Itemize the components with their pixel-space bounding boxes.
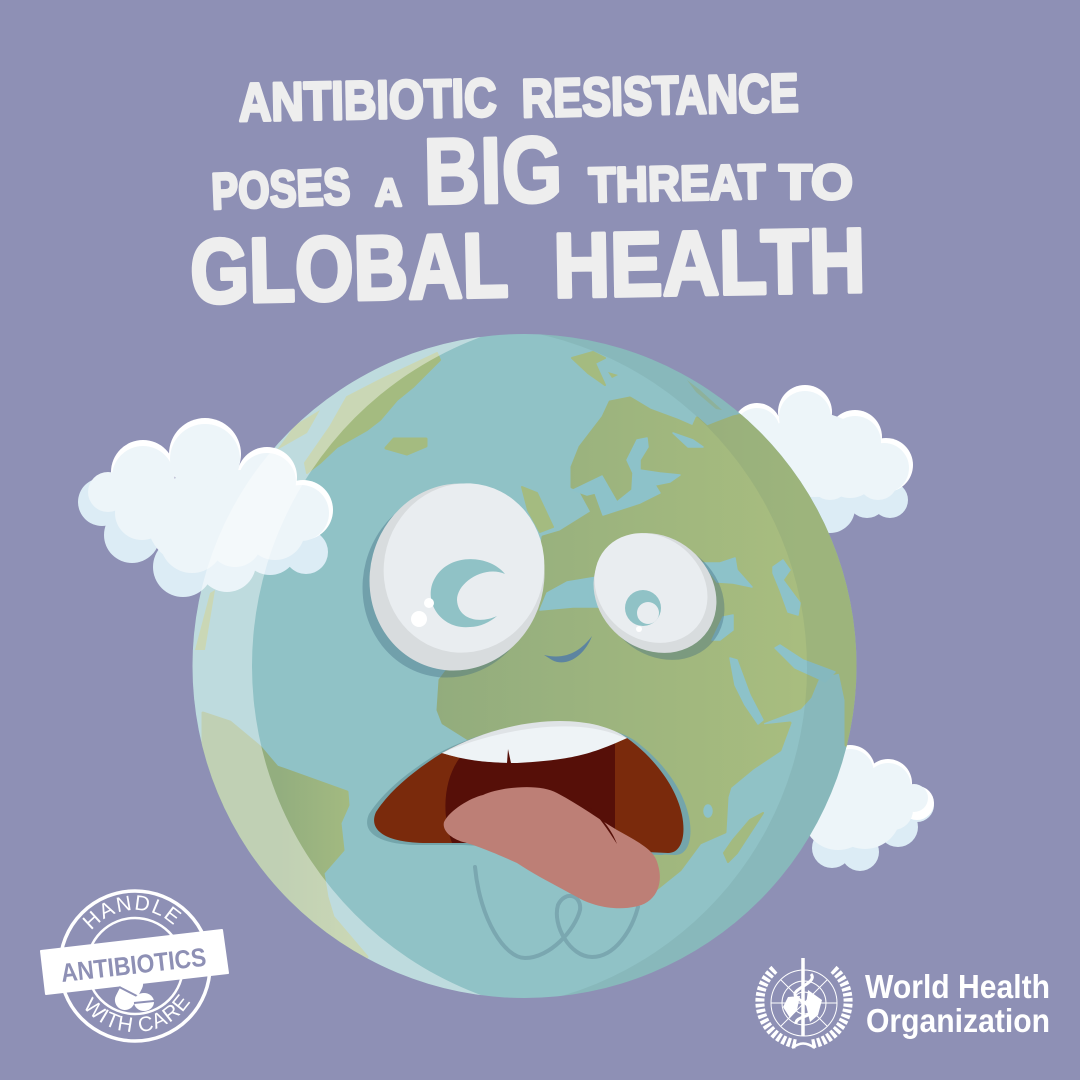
title line 2: A [375,172,402,215]
title line 2: TO [779,156,853,210]
Iceland [386,439,426,454]
organization name [865,968,1050,1039]
title line 1 [238,63,799,133]
shaded right crescent [542,334,856,995]
inland seas [540,433,835,817]
South America [203,713,367,957]
organization name: World Health [865,968,1050,1005]
Greenland [305,353,440,473]
icon: tablet [134,993,154,1011]
wreath [760,968,848,1044]
serpent [795,974,812,1024]
left eye [342,464,565,697]
title line 2: THREAT [588,155,766,213]
right iris [625,590,661,626]
Eurasia and Africa [436,396,856,890]
left iris [431,559,505,627]
title line 3: HEALTH [553,211,866,317]
Svalbard [572,352,605,385]
face [342,464,749,958]
teeth [442,721,627,763]
globe [192,334,856,998]
emblem [760,958,848,1048]
title line 3 [189,211,866,323]
title line 2: BIG [423,117,563,224]
curved text: with care: WITH CARE [86,994,190,1032]
title line 2 [210,117,853,224]
land masses [195,352,900,957]
title line 3: GLOBAL [189,215,509,323]
staff [801,958,805,1036]
logo: World Health Organization [760,958,1050,1048]
mouth [374,722,683,853]
outer ring [60,891,210,1041]
base branches [792,1044,815,1048]
organization name: Organization [866,1002,1050,1039]
nose [544,636,592,662]
continents [783,990,822,1022]
ribbon [41,930,228,994]
title line 1: ANTIBIOTIC [238,68,497,133]
badge: handle antibiotics with care [40,889,229,1043]
ribbon text: ANTIBIOTICS [59,942,208,988]
title line 2: POSES [210,158,351,220]
cloud: left [78,418,333,597]
cloud: lower right [803,745,934,871]
icon: capsule [111,970,147,1014]
title [189,63,866,323]
tongue crease [587,805,617,844]
mouth shadow [367,724,690,855]
Novaya Zemlya [687,380,722,410]
cloud: upper right [733,385,913,533]
Ireland and Britain [522,487,553,532]
drool loops [475,867,638,958]
throat [445,740,615,843]
inner ring [87,918,183,1014]
tongue [444,787,660,908]
title line 1: RESISTANCE [521,63,799,129]
right eye [569,508,749,685]
curved text: handle: HANDLE [82,895,182,930]
light left crescent [192,337,480,995]
globe grid [771,970,837,1036]
Madagascar [724,813,763,862]
ocean [192,334,856,998]
